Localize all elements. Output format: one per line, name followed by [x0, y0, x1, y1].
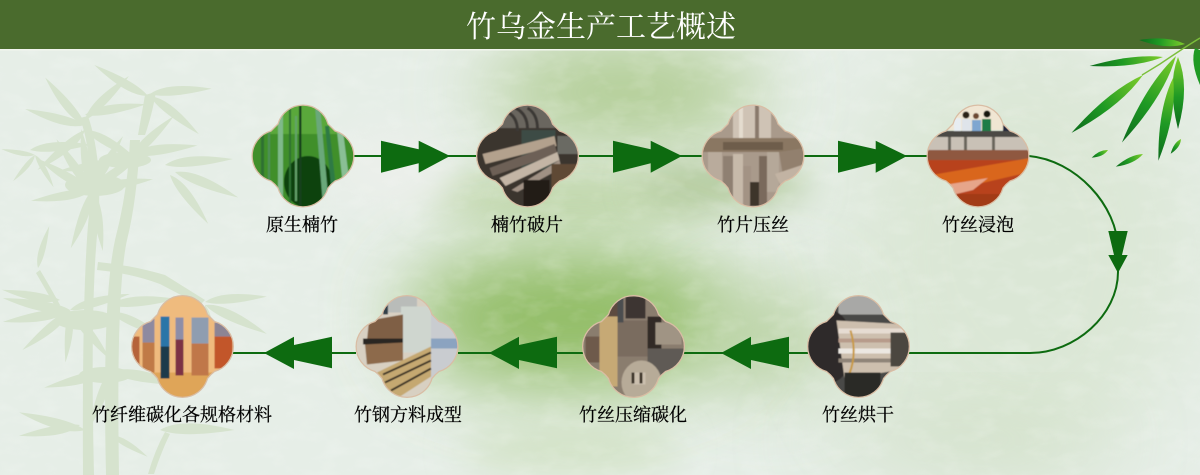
title: 竹乌金生产工艺概述 — [466, 11, 736, 44]
header bar — [0, 0, 1200, 50]
photo: bamboo steel stacks — [355, 294, 459, 398]
step: 竹纤维碳化各规格材料 — [92, 294, 272, 425]
photo: stacked bamboo strips — [701, 104, 805, 208]
arrow: step 3 to 4 — [838, 141, 907, 173]
photo: carbonized material boards — [130, 294, 234, 398]
photo: drying kiln — [806, 294, 910, 398]
arrow: step 7 to 8 — [264, 337, 332, 369]
step: 竹钢方料成型 — [354, 294, 462, 425]
connector lines — [233, 156, 1118, 353]
arrow: step 6 to 7 — [489, 337, 557, 369]
label: 竹钢方料成型 — [354, 405, 462, 425]
photo: red soaking pool — [926, 104, 1030, 208]
arrow: step 1 to 2 — [381, 141, 450, 173]
step: 原生楠竹 — [251, 104, 355, 235]
arrow: step 4 to 5 — [1108, 231, 1128, 273]
label: 竹纤维碳化各规格材料 — [92, 405, 272, 425]
arrow: step 5 to 6 — [721, 337, 789, 369]
icon: green bamboo sprig — [1069, 37, 1200, 169]
step: 竹丝烘干 — [806, 294, 910, 425]
step: 竹丝浸泡 — [926, 104, 1030, 235]
label: 竹片压丝 — [717, 215, 789, 235]
label: 楠竹破片 — [491, 215, 563, 235]
photo: splitting machine — [476, 104, 580, 208]
label: 竹丝压缩碳化 — [579, 405, 687, 425]
step: 楠竹破片 — [476, 104, 580, 235]
photo: bamboo forest — [251, 104, 355, 208]
step: 竹片压丝 — [701, 104, 805, 235]
bamboo silhouette watermark — [1, 62, 269, 475]
label: 竹丝烘干 — [822, 405, 894, 425]
step: 竹丝压缩碳化 — [579, 294, 687, 425]
label: 竹丝浸泡 — [942, 215, 1014, 235]
label: 原生楠竹 — [266, 215, 338, 235]
photo: compression machine — [582, 294, 686, 404]
arrow: step 2 to 3 — [613, 141, 682, 173]
